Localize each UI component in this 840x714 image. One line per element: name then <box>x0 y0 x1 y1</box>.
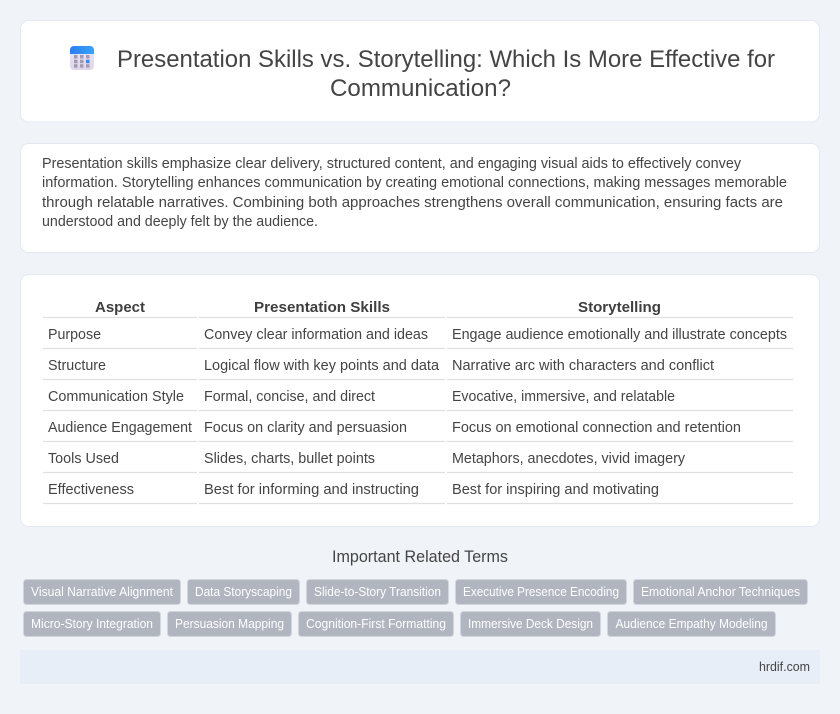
panel: intro paragraph: Presentation skills emphasize clear delivery, structured content, and engaging visual aids to effectively convey <box>42 156 742 172</box>
related term tags <box>24 580 808 636</box>
row: Audience Engagement: Focus on emotional connection and retention <box>452 420 741 436</box>
related term tags: Slide-to-Story Transition <box>314 585 441 599</box>
row: Tools Used: Tools Used <box>48 451 119 467</box>
panel: intro paragraph <box>20 144 820 252</box>
related term tags: Immersive Deck Design <box>468 617 593 631</box>
table header: Aspect <box>95 299 145 316</box>
panel: intro paragraph: understood and deeply felt by the audience. <box>42 214 318 230</box>
header panel <box>20 20 820 122</box>
row: Communication Style: Evocative, immersive, and relatable <box>452 389 675 405</box>
row: Communication Style: Communication Style <box>48 389 184 405</box>
row: Purpose: Engage audience emotionally and illustrate concepts <box>452 327 787 343</box>
row: Audience Engagement: Audience Engagement <box>48 420 192 436</box>
related term tags: Audience Empathy Modeling <box>616 617 768 631</box>
icon: calendar <box>70 46 94 70</box>
row: Tools Used <box>48 451 686 467</box>
row: Effectiveness: Effectiveness <box>48 482 134 498</box>
table header: Storytelling <box>578 299 661 316</box>
row: Communication Style <box>48 389 675 405</box>
row: Audience Engagement: Focus on clarity and persuasion <box>204 420 407 436</box>
title: Communication? <box>330 75 511 102</box>
row: Structure: Logical flow with key points and data <box>204 358 440 374</box>
row: Audience Engagement <box>48 420 741 436</box>
related term tags: Persuasion Mapping <box>175 617 284 631</box>
row: Effectiveness: Best for inspiring and motivating <box>452 482 659 498</box>
row: Structure: Narrative arc with characters and conflict <box>452 358 714 374</box>
related term tags: Emotional Anchor Techniques <box>641 585 800 599</box>
panel: intro paragraph: information. Storytelling enhances communication by creating emotional connections, making messages memorable <box>42 175 787 191</box>
related term tags: Executive Presence Encoding <box>463 585 619 599</box>
row: Purpose: Purpose <box>48 327 101 343</box>
row: Structure <box>48 358 714 374</box>
title <box>117 46 775 102</box>
row: Tools Used: Slides, charts, bullet points <box>204 451 375 467</box>
related term tags: Cognition-First Formatting <box>306 617 446 631</box>
panel: comparison table <box>20 274 820 526</box>
row: Tools Used: Metaphors, anecdotes, vivid imagery <box>452 451 686 467</box>
related term tags: Data Storyscaping <box>195 585 292 599</box>
row: Purpose: Convey clear information and ideas <box>204 327 428 343</box>
table header: Presentation Skills <box>254 299 390 316</box>
related term tags: Visual Narrative Alignment <box>31 585 173 599</box>
row: Structure: Structure <box>48 358 106 374</box>
related term tags: Micro-Story Integration <box>31 617 153 631</box>
footer: hrdif.com <box>759 659 810 674</box>
panel: intro paragraph: through relatable narratives. Combining both approaches strengthens overall communication, ensuring facts are <box>42 195 783 211</box>
table header <box>95 299 661 316</box>
row: Effectiveness: Best for informing and instructing <box>204 482 419 498</box>
title: Presentation Skills vs. Storytelling: Which Is More Effective for <box>117 46 775 73</box>
row: Communication Style: Formal, concise, and direct <box>204 389 375 405</box>
heading: Important Related Terms: Important Related Terms <box>332 548 508 566</box>
row: Effectiveness <box>48 482 659 498</box>
row: Purpose <box>48 327 787 343</box>
footer <box>20 650 820 684</box>
